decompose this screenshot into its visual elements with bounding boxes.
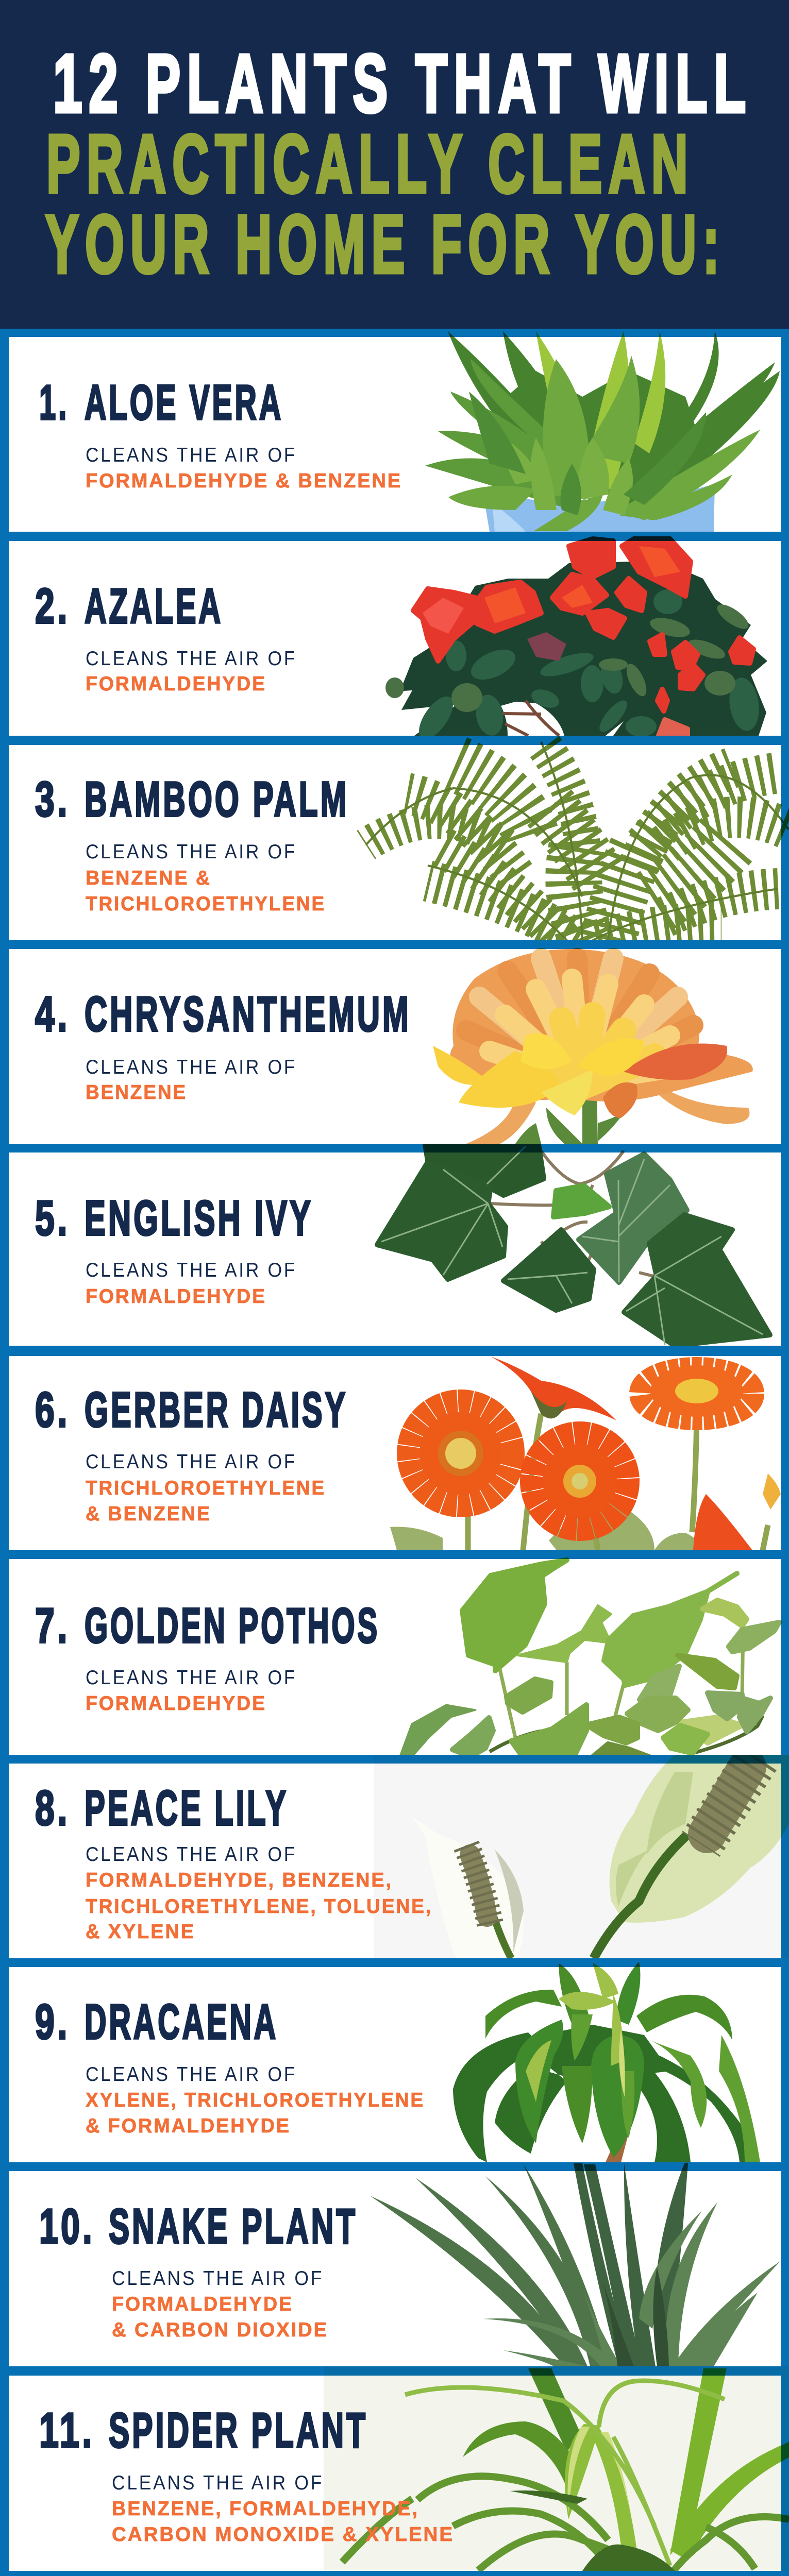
plant: spider plant <box>324 2366 789 2571</box>
heading: 10. snake plant: 10. <box>39 2199 95 2254</box>
heading: 5. english ivy: 5. <box>35 1191 70 1246</box>
heading: 7. golden pothos: 7. <box>35 1598 70 1653</box>
panel: gerber daisy <box>0 1346 789 1550</box>
plant: peace lily <box>374 1755 789 1958</box>
heading: 8. peace lily <box>35 1781 289 1836</box>
text: cleans formaldehyde and carbon dioxide: CLEANS THE AIR OF <box>112 2267 324 2290</box>
text: cleans benzene, formaldehyde, carbon monoxide and xylene: CARBON MONOXIDE & XYLENE <box>112 2523 454 2546</box>
text: cleans formaldehyde, benzene, trichlorethylene, toluene, xylene: & XYLENE <box>86 1921 195 1943</box>
text: cleans formaldehyde and benzene: CLEANS THE AIR OF <box>86 444 297 466</box>
text: cleans formaldehyde: CLEANS THE AIR OF <box>86 1259 297 1281</box>
plant: golden pothos <box>400 1560 779 1757</box>
heading: 1. aloe vera: 1. <box>39 375 69 430</box>
heading: 6. gerber daisy: GERBER DAISY <box>85 1382 348 1437</box>
panel: spider plant <box>0 2366 789 2571</box>
text: cleans xylene, trichloroethylene and formaldehyde: CLEANS THE AIR OF <box>86 2063 297 2086</box>
plant: snake plant <box>370 2163 780 2366</box>
heading: 2. azalea: AZALEA <box>85 579 223 634</box>
text: cleans formaldehyde: CLEANS THE AIR OF <box>86 1667 297 1689</box>
heading: 4. chrysanthemum <box>35 987 411 1042</box>
text: cleans xylene, trichloroethylene and formaldehyde: XYLENE, TRICHLOROETHYLENE <box>86 2089 425 2111</box>
plant: english ivy <box>377 1144 770 1346</box>
text: cleans formaldehyde <box>86 1259 297 1308</box>
panel: dracaena <box>0 1958 789 2162</box>
heading: 10. snake plant: SNAKE PLANT <box>109 2199 358 2254</box>
text: cleans benzene: BENZENE <box>86 1081 187 1104</box>
text: cleans formaldehyde: CLEANS THE AIR OF <box>86 648 297 670</box>
heading: 3. bamboo palm: 3. <box>35 772 70 827</box>
heading: 3. bamboo palm <box>35 772 349 827</box>
heading: 8. peace lily: 8. <box>35 1781 70 1836</box>
heading: 5. english ivy: ENGLISH IVY <box>85 1191 313 1246</box>
panel: chrysanthemum <box>0 940 789 1144</box>
plant: aloe vera <box>425 331 780 532</box>
panel: azalea <box>0 532 789 744</box>
text: cleans trichloroethylene and benzene: & BENZENE <box>86 1503 211 1525</box>
panel: snake plant <box>0 2162 789 2366</box>
heading: 7. golden pothos <box>35 1598 380 1653</box>
text: cleans benzene and trichloroethylene: BENZENE & <box>86 867 211 889</box>
text: cleans formaldehyde and benzene: FORMALDEHYDE & BENZENE <box>86 470 402 492</box>
text: cleans formaldehyde and carbon dioxide: FORMALDEHYDE <box>112 2293 293 2315</box>
title <box>45 37 752 290</box>
heading: 1. aloe vera: ALOE VERA <box>85 375 283 430</box>
panel: weeping fig <box>0 2571 789 2576</box>
text: cleans formaldehyde: FORMALDEHYDE <box>86 1285 266 1308</box>
text: cleans formaldehyde <box>86 648 297 695</box>
text: cleans formaldehyde and carbon dioxide <box>112 2267 328 2341</box>
text: cleans formaldehyde and carbon dioxide: & CARBON DIOXIDE <box>112 2319 328 2341</box>
heading: 3. bamboo palm: BAMBOO PALM <box>85 772 349 827</box>
text: cleans formaldehyde, benzene, trichlorethylene, toluene, xylene <box>86 1843 432 1943</box>
panel: peace lily <box>0 1755 789 1958</box>
text: cleans formaldehyde, benzene, trichlorethylene, toluene, xylene: CLEANS THE AIR OF <box>86 1843 297 1866</box>
text: cleans formaldehyde: FORMALDEHYDE <box>86 1692 266 1715</box>
heading: 11. spider plant: 11. <box>39 2403 95 2458</box>
text: cleans xylene, trichloroethylene and formaldehyde <box>86 2063 425 2137</box>
plant: gerber daisy <box>390 1357 781 1550</box>
text: cleans formaldehyde, benzene, trichlorethylene, toluene, xylene: TRICHLORETHYLENE, TOLUENE, <box>86 1895 432 1918</box>
heading: 9. dracaena: 9. <box>35 1994 70 2049</box>
plant: azalea <box>385 539 767 744</box>
text: cleans benzene, formaldehyde, carbon monoxide and xylene: CLEANS THE AIR OF <box>112 2472 324 2494</box>
heading: 6. gerber daisy <box>35 1382 348 1437</box>
heading: 1. aloe vera <box>39 375 283 430</box>
panel: aloe vera <box>0 329 789 532</box>
heading: 5. english ivy <box>35 1191 313 1246</box>
text: cleans formaldehyde <box>86 1667 297 1715</box>
text: cleans benzene, formaldehyde, carbon monoxide and xylene <box>112 2472 454 2546</box>
panel: bamboo palm <box>0 736 789 940</box>
panel: english ivy <box>0 1144 789 1346</box>
heading: 7. golden pothos: GOLDEN POTHOS <box>85 1598 380 1653</box>
text: cleans trichloroethylene and benzene <box>86 1451 326 1525</box>
heading: 8. peace lily: PEACE LILY <box>85 1781 289 1836</box>
text: cleans formaldehyde: FORMALDEHYDE <box>86 673 266 695</box>
text: cleans benzene and trichloroethylene: TRICHLOROETHYLENE <box>86 893 326 915</box>
heading: 4. chrysanthemum: CHRYSANTHEMUM <box>85 987 411 1042</box>
plant: chrysanthemum <box>433 949 753 1144</box>
heading: 4. chrysanthemum: 4. <box>35 987 70 1042</box>
heading: 11. spider plant <box>39 2403 368 2458</box>
text: cleans benzene: CLEANS THE AIR OF <box>86 1056 297 1078</box>
heading: 2. azalea: 2. <box>35 579 70 634</box>
text: cleans benzene and trichloroethylene: CLEANS THE AIR OF <box>86 841 297 863</box>
heading: 9. dracaena: DRACAENA <box>85 1994 278 2049</box>
text: cleans xylene, trichloroethylene and formaldehyde: & FORMALDEHYDE <box>86 2115 291 2137</box>
text: cleans trichloroethylene and benzene: CLEANS THE AIR OF <box>86 1451 297 1473</box>
panel: golden pothos <box>0 1550 789 1757</box>
heading: 9. dracaena <box>35 1994 278 2049</box>
plant: dracaena <box>453 1962 760 2162</box>
text: cleans benzene and trichloroethylene <box>86 841 326 915</box>
text: cleans formaldehyde, benzene, trichlorethylene, toluene, xylene: FORMALDEHYDE, BENZENE, <box>86 1869 393 1891</box>
plant: bamboo palm <box>366 742 788 940</box>
heading: 10. snake plant <box>39 2199 358 2254</box>
heading: 6. gerber daisy: 6. <box>35 1382 70 1437</box>
text: cleans trichloroethylene and benzene: TRICHLOROETHYLENE <box>86 1477 326 1499</box>
text: cleans benzene, formaldehyde, carbon monoxide and xylene: BENZENE, FORMALDEHYDE, <box>112 2498 419 2520</box>
text: cleans formaldehyde and benzene <box>86 444 402 492</box>
text: cleans benzene <box>86 1056 297 1104</box>
heading: 11. spider plant: SPIDER PLANT <box>109 2403 368 2458</box>
heading: 2. azalea <box>35 579 223 634</box>
